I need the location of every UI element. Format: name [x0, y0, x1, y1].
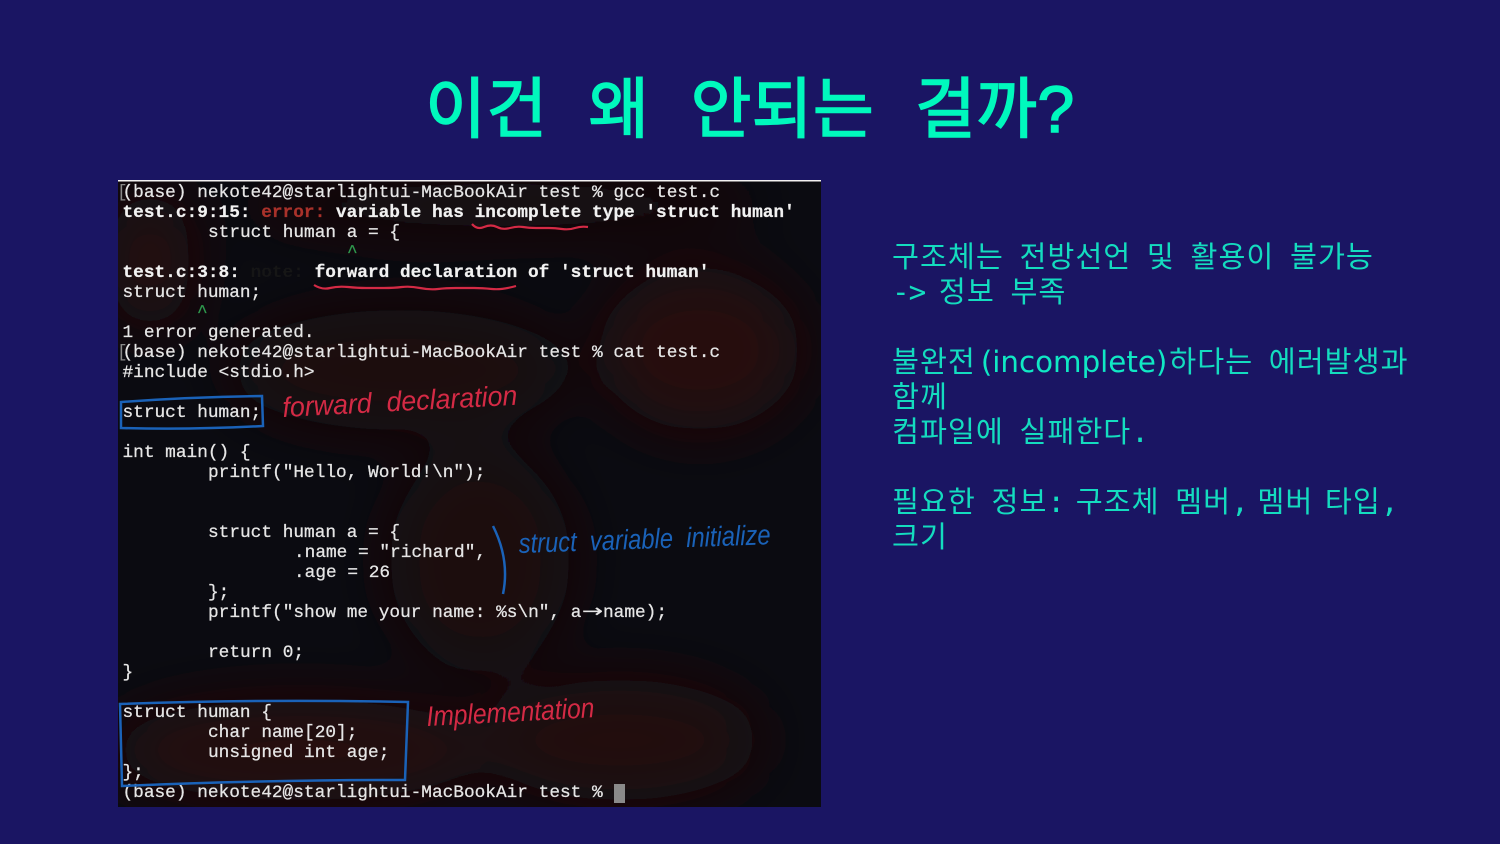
text block: explanation: 컴파일에 실패한다.	[892, 415, 1150, 449]
terminal code text: test.c:9:15: error: variable has incomplete type 'struct human'	[122, 203, 795, 223]
text block: explanation: -> 정보 부족	[892, 275, 1066, 309]
terminal code text: struct human;	[122, 403, 261, 423]
terminal background	[110, 180, 821, 807]
panel: terminal screenshot	[118, 180, 821, 807]
title: 이건 왜 안되는 걸까?	[425, 72, 1075, 146]
terminal code text: struct human a = {	[208, 523, 400, 543]
text block: explanation: 필요한 정보: 구조체 멤버, 멤버 타입,	[892, 485, 1396, 519]
terminal code text: printf("Hello, World!\n");	[208, 463, 485, 483]
annotation: implementation label: Implementation	[426, 692, 595, 732]
terminal code text: };	[122, 763, 144, 783]
terminal code text: };	[208, 583, 229, 603]
terminal code text: 1 error generated.	[122, 323, 315, 343]
terminal code text: ^	[347, 243, 358, 263]
annotation: blue box implementation	[120, 701, 408, 786]
terminal code text: (base) nekote42@starlightui-MacBookAir test %	[122, 783, 603, 803]
terminal code text: test.c:3:8: note: forward declaration of 'struct human'	[122, 263, 709, 283]
terminal code text: unsigned int age;	[208, 743, 389, 763]
annotation: blue bracket	[493, 526, 505, 594]
terminal code text: struct human {	[122, 703, 272, 723]
terminal code text: #include <stdio.h>	[122, 363, 315, 383]
text block: explanation: 크기	[892, 520, 948, 554]
slide	[118, 76, 1407, 807]
terminal code text: ^	[197, 303, 208, 323]
terminal code text: return 0;	[208, 643, 304, 663]
terminal code text: struct human;	[122, 283, 261, 303]
terminal code text: int main() {	[122, 443, 251, 463]
annotation: forward declaration label: forward declaration	[282, 380, 518, 423]
terminal code text: →	[582, 601, 603, 622]
terminal code text: (base) nekote42@starlightui-MacBookAir test % cat test.c	[122, 343, 720, 363]
terminal cursor	[614, 784, 625, 803]
terminal code text: char name[20];	[208, 723, 357, 743]
terminal code text: name);	[603, 603, 667, 623]
text block: explanation	[892, 240, 1409, 554]
terminal code text: (base) nekote42@starlightui-MacBookAir test % gcc test.c	[122, 183, 720, 203]
text block: explanation: 구조체는 전방선언 및 활용이 불가능	[892, 240, 1374, 274]
text block: explanation: 함께	[892, 380, 948, 414]
terminal code text: .age = 26	[294, 563, 390, 583]
annotation: red underline forward declaration	[314, 285, 516, 289]
terminal code text	[117, 183, 795, 803]
terminal code text: printf("show me your name: %s\n", a	[208, 603, 582, 623]
terminal code text: }	[122, 663, 133, 683]
annotation: red underline incomplete	[472, 224, 588, 229]
text block: explanation: 불완전(incomplete)하다는 에러발생과	[892, 345, 1409, 379]
annotation: blue box forward declaration	[121, 396, 263, 429]
terminal code text: .name = "richard",	[294, 543, 486, 563]
terminal code text: struct human a = {	[208, 223, 400, 243]
annotation: struct variable initialize label: struct variable initialize	[518, 519, 771, 559]
